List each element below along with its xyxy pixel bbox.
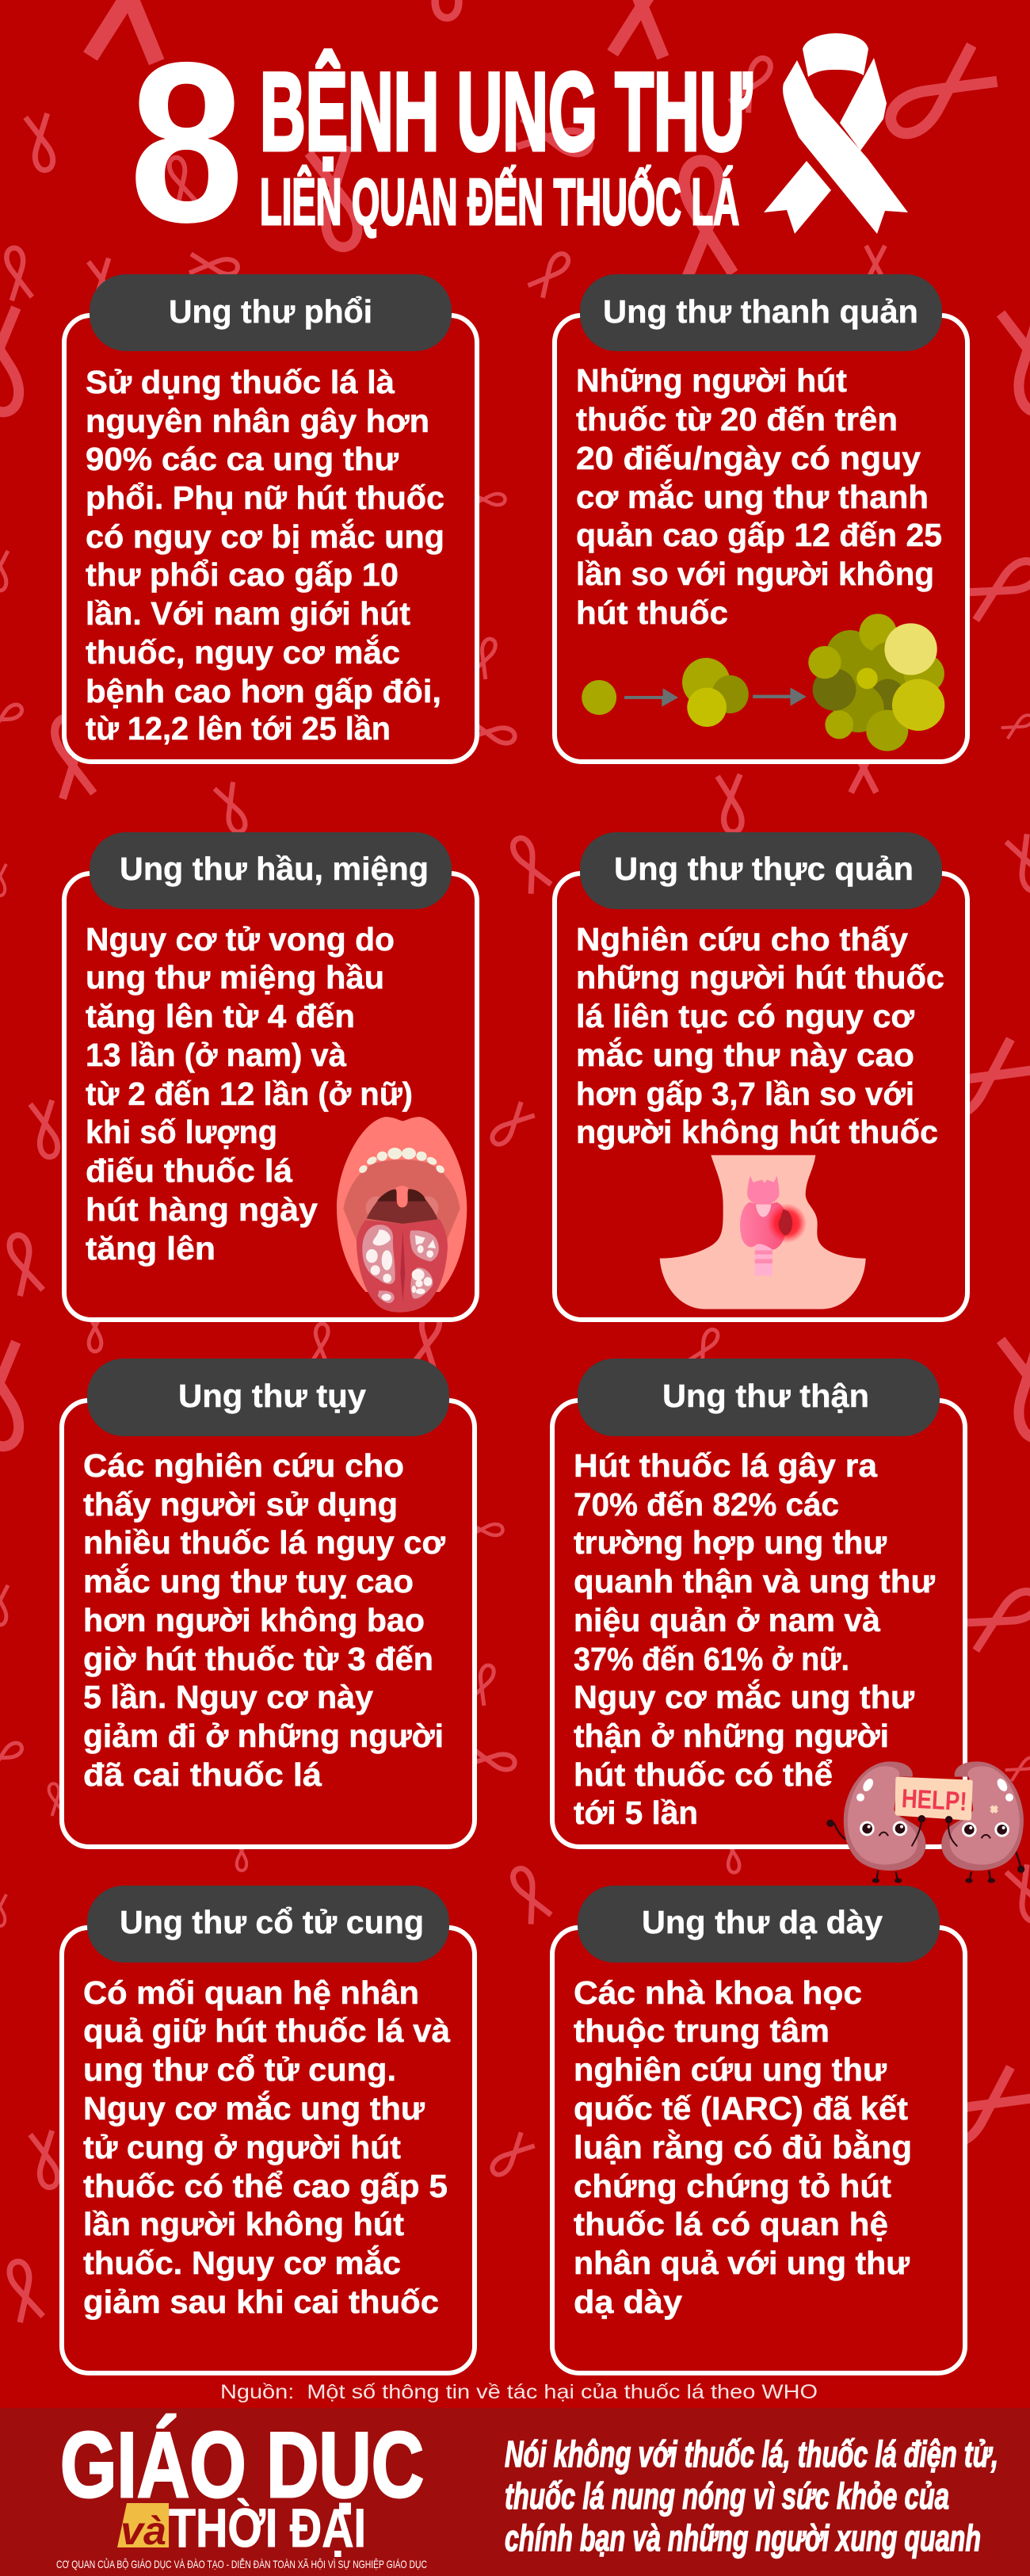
heading pill	[578, 1886, 940, 1963]
body text: từ 12,2 lên tới 25 lần	[86, 710, 391, 747]
body text: hút thuốc có thể	[574, 1756, 833, 1793]
body text: từ 2 đến 12 lần (ở nữ)	[86, 1076, 413, 1112]
title numeral 8: 8	[129, 15, 244, 270]
body text: Nghiên cứu cho thấy	[576, 921, 908, 957]
heading pill	[90, 274, 452, 351]
body text: hút thuốc	[576, 594, 728, 631]
heading pill	[580, 832, 942, 909]
body text: quốc tế (IARC) đã kết	[574, 2090, 908, 2127]
body text: lần người không hút	[83, 2206, 404, 2242]
body text: tăng lên từ 4 đến	[86, 998, 355, 1034]
panel frame	[552, 1928, 965, 2373]
body text: tới 5 lần	[574, 1794, 698, 1831]
body text: giảm sau khi cai thuốc	[83, 2284, 439, 2320]
body text: Nguy cơ mắc ung thư	[83, 2090, 425, 2127]
body text: hơn gấp 3,7 lần so với	[576, 1076, 914, 1112]
heading pill	[578, 1359, 940, 1436]
body text: điếu thuốc lá	[86, 1152, 292, 1189]
footer band	[0, 2408, 1030, 2576]
body text: những người hút thuốc	[576, 959, 944, 996]
body text: 37% đến 61% ở nữ.	[574, 1641, 849, 1677]
body text: nhiều thuốc lá nguy cơ	[83, 1524, 446, 1561]
icon: neck with throat tumour	[660, 1155, 866, 1309]
body text: thuốc từ 20 đến trên	[576, 401, 898, 438]
icon: tumour growth stages	[582, 613, 944, 751]
body text: 13 lần (ở nam) và	[86, 1037, 346, 1073]
body text	[574, 1447, 935, 1831]
heading pill: Ung thư hầu, miệng	[120, 850, 429, 887]
body text: giờ hút thuốc từ 3 đến	[83, 1641, 433, 1677]
body text: 5 lần. Nguy cơ này	[83, 1679, 373, 1715]
body text: Nguy cơ tử vong do	[86, 921, 395, 957]
heading pill: Ung thư thanh quản	[603, 293, 918, 330]
body text: lần so với người không	[576, 556, 934, 592]
heading pill: Ung thư phổi	[169, 293, 372, 330]
body text: Có mối quan hệ nhân	[83, 1974, 419, 2011]
heading pill	[90, 832, 452, 909]
body text: Những người hút	[576, 362, 847, 399]
panel: Ung thư thận	[552, 1359, 1024, 1883]
body text: ung thư cổ tử cung.	[83, 2051, 396, 2088]
body text: giảm đi ở những người	[83, 1718, 444, 1754]
body text: mắc ung thư tuỵ cao	[83, 1563, 414, 1599]
body text: nghiên cứu ung thư	[574, 2051, 887, 2088]
icon: awareness ribbon	[764, 33, 908, 234]
body text: lá liên tục có nguy cơ	[576, 998, 915, 1034]
body text: tăng lên	[86, 1230, 216, 1267]
panel: Ung thư cổ tử cung	[62, 1886, 475, 2373]
body text: 20 điếu/ngày có nguy	[576, 440, 921, 476]
body text: dạ dày	[574, 2284, 682, 2320]
body text: thận ở những người	[574, 1718, 889, 1754]
source note: Nguồn: Một số thông tin về tác hại của thuốc lá theo WHO	[220, 2381, 818, 2403]
title	[129, 15, 752, 270]
body text: chứng chứng tỏ hút	[574, 2168, 891, 2204]
body text: ung thư miệng hầu	[86, 959, 384, 996]
body text: niệu quản ở nam và	[574, 1602, 880, 1638]
body text	[86, 921, 413, 1267]
panel: Ung thư phổi	[64, 274, 477, 762]
panel: Ung thư thực quản	[555, 832, 967, 1320]
body text: người không hút thuốc	[576, 1114, 938, 1150]
heading pill	[580, 274, 942, 351]
panel frame	[62, 1401, 475, 1847]
body text: quả giữ hút thuốc lá và	[83, 2012, 450, 2049]
body text: phổi. Phụ nữ hút thuốc	[86, 480, 444, 516]
logo badge: và: và	[120, 2509, 166, 2553]
body text: bệnh cao hơn gấp đôi,	[86, 673, 441, 709]
heading pill: Ung thư dạ dày	[642, 1904, 883, 1940]
heading pill: Ung thư tụy	[178, 1378, 366, 1414]
body text: thuốc lá có quan hệ	[574, 2206, 888, 2242]
heading pill: Ung thư cổ tử cung	[120, 1904, 424, 1940]
body text: thấy người sử dụng	[83, 1486, 398, 1523]
body text	[83, 1974, 450, 2320]
body text: hơn người không bao	[83, 1602, 425, 1638]
panel: Ung thư hầu, miệng	[64, 832, 477, 1320]
panel frame	[555, 315, 967, 762]
body text: đã cai thuốc lá	[83, 1756, 322, 1793]
body text: cơ mắc ung thư thanh	[576, 479, 929, 515]
body text: có nguy cơ bị mắc ung	[86, 518, 444, 555]
body text: Các nghiên cứu cho	[83, 1447, 404, 1484]
body text: luận rằng có đủ bằng	[574, 2129, 912, 2165]
panel: Ung thư tụy	[62, 1359, 475, 1847]
body text	[83, 1447, 446, 1793]
panel frame	[62, 1928, 475, 2373]
body text: quanh thận và ung thư	[574, 1563, 935, 1599]
panel: Ung thư thanh quản	[555, 274, 967, 762]
logo: Giáo dục và Thời đại: CƠ QUAN CỦA BỘ GIÁO DỤC VÀ ĐÀO TẠO - DIỄN ĐÀN TOÀN XÃ HỘI VÌ SỰ NGHIỆP GIÁO DỤC	[56, 2557, 427, 2570]
body text: hút hàng ngày	[86, 1191, 318, 1228]
panel frame	[64, 873, 477, 1320]
body text: mắc ung thư này cao	[576, 1037, 914, 1073]
body text: Hút thuốc lá gây ra	[574, 1447, 878, 1484]
heading pill	[87, 1886, 449, 1963]
body text: nhân quả với ung thư	[574, 2245, 910, 2281]
logo: Giáo dục và Thời đại	[56, 2413, 427, 2570]
body text: quản cao gấp 12 đến 25	[576, 517, 942, 553]
body text: thuốc, nguy cơ mắc	[86, 634, 400, 671]
body text	[86, 364, 444, 747]
panel: Ung thư dạ dày	[552, 1886, 965, 2373]
panel frame	[552, 1401, 965, 1847]
body text	[576, 362, 942, 631]
body text: 90% các ca ung thư	[86, 441, 399, 477]
body text: 70% đến 82% các	[574, 1486, 839, 1523]
icon: open mouth with tongue lesions	[337, 1117, 467, 1313]
body text: Các nhà khoa học	[574, 1974, 862, 2011]
icon: kidneys holding help sign	[826, 1761, 1024, 1883]
body text: Nguy cơ mắc ung thư	[574, 1679, 914, 1715]
body text: thuốc có thể cao gấp 5	[83, 2168, 448, 2204]
body text: thuốc. Nguy cơ mắc	[83, 2245, 401, 2281]
body text	[574, 1974, 912, 2320]
slogan	[505, 2433, 998, 2559]
body text: tử cung ở người hút	[83, 2129, 401, 2165]
heading pill	[87, 1359, 449, 1436]
panel frame	[64, 315, 477, 762]
body text: thư phổi cao gấp 10	[86, 556, 399, 593]
logo: Giáo dục và Thời đại: GIÁO DỤC	[60, 2413, 424, 2517]
logo: Giáo dục và Thời đại: THỜI ĐẠI	[169, 2498, 366, 2559]
body text	[576, 921, 944, 1150]
icon: kidneys holding help sign: HELP!	[901, 1784, 967, 1817]
body text: thuộc trung tâm	[574, 2012, 830, 2049]
body text: Sử dụng thuốc lá là	[86, 364, 395, 400]
panel frame	[555, 873, 967, 1320]
body text: trường hợp ung thư	[574, 1524, 887, 1561]
body text: nguyên nhân gây hơn	[86, 403, 429, 439]
heading pill: Ung thư thận	[662, 1378, 869, 1414]
heading pill: Ung thư thực quản	[614, 850, 914, 887]
body text: khi số lượng	[86, 1114, 277, 1150]
body text: lần. Với nam giới hút	[86, 595, 410, 632]
